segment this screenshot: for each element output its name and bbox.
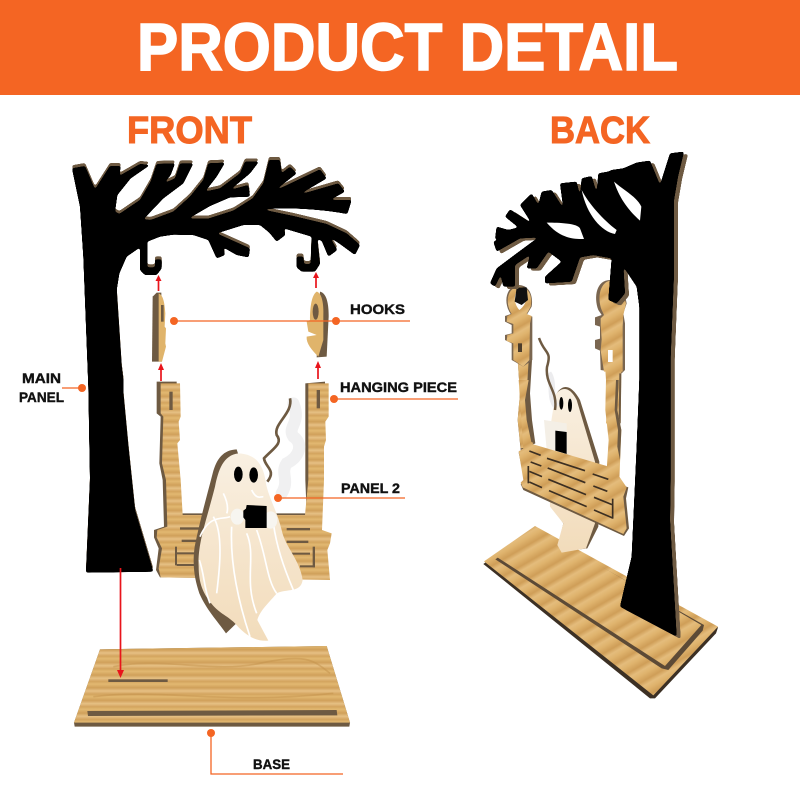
heading: back: BACK xyxy=(550,110,650,152)
ghost hands xyxy=(231,509,277,529)
front: right hook part xyxy=(307,292,329,357)
front: steam xyxy=(264,398,299,493)
front: main panel tree xyxy=(72,157,360,573)
back ghost mug xyxy=(555,431,567,454)
back ghost eyes xyxy=(559,397,572,412)
back: swing seat xyxy=(519,380,629,536)
title banner: PRODUCT DETAIL xyxy=(137,10,678,85)
back: swing hanging piece xyxy=(505,280,627,450)
callout: panel 2 xyxy=(274,480,405,502)
back: main panel tree xyxy=(490,152,688,639)
right post xyxy=(595,280,627,423)
callout: hanging piece: HANGING PIECE xyxy=(340,379,457,395)
callout: hooks: HOOKS xyxy=(350,301,405,317)
front: left hook part xyxy=(152,293,166,362)
ghost eyes xyxy=(234,467,258,483)
callout: hooks xyxy=(170,301,410,325)
callout: main panel: MAIN xyxy=(22,370,61,386)
title banner xyxy=(0,0,800,95)
callout: panel 2: PANEL 2 xyxy=(341,480,400,496)
back tree gaps xyxy=(547,182,641,239)
back: ghost panel xyxy=(544,373,599,553)
back: steam line xyxy=(539,338,555,410)
callout: main panel: PANEL xyxy=(19,389,64,405)
front: swing hanging piece xyxy=(154,382,332,580)
front: base slot xyxy=(108,679,168,682)
ghost mug xyxy=(243,505,267,528)
callout: base xyxy=(207,729,343,774)
callout: main panel xyxy=(19,370,86,405)
callout: base: BASE xyxy=(253,756,290,772)
front: base board xyxy=(74,646,350,727)
callout: hanging piece xyxy=(330,379,458,403)
back: base board xyxy=(483,526,718,698)
front: ghost panel xyxy=(194,398,303,641)
heading: front: FRONT xyxy=(127,110,252,152)
left post xyxy=(505,285,535,450)
red arrows xyxy=(117,272,321,678)
